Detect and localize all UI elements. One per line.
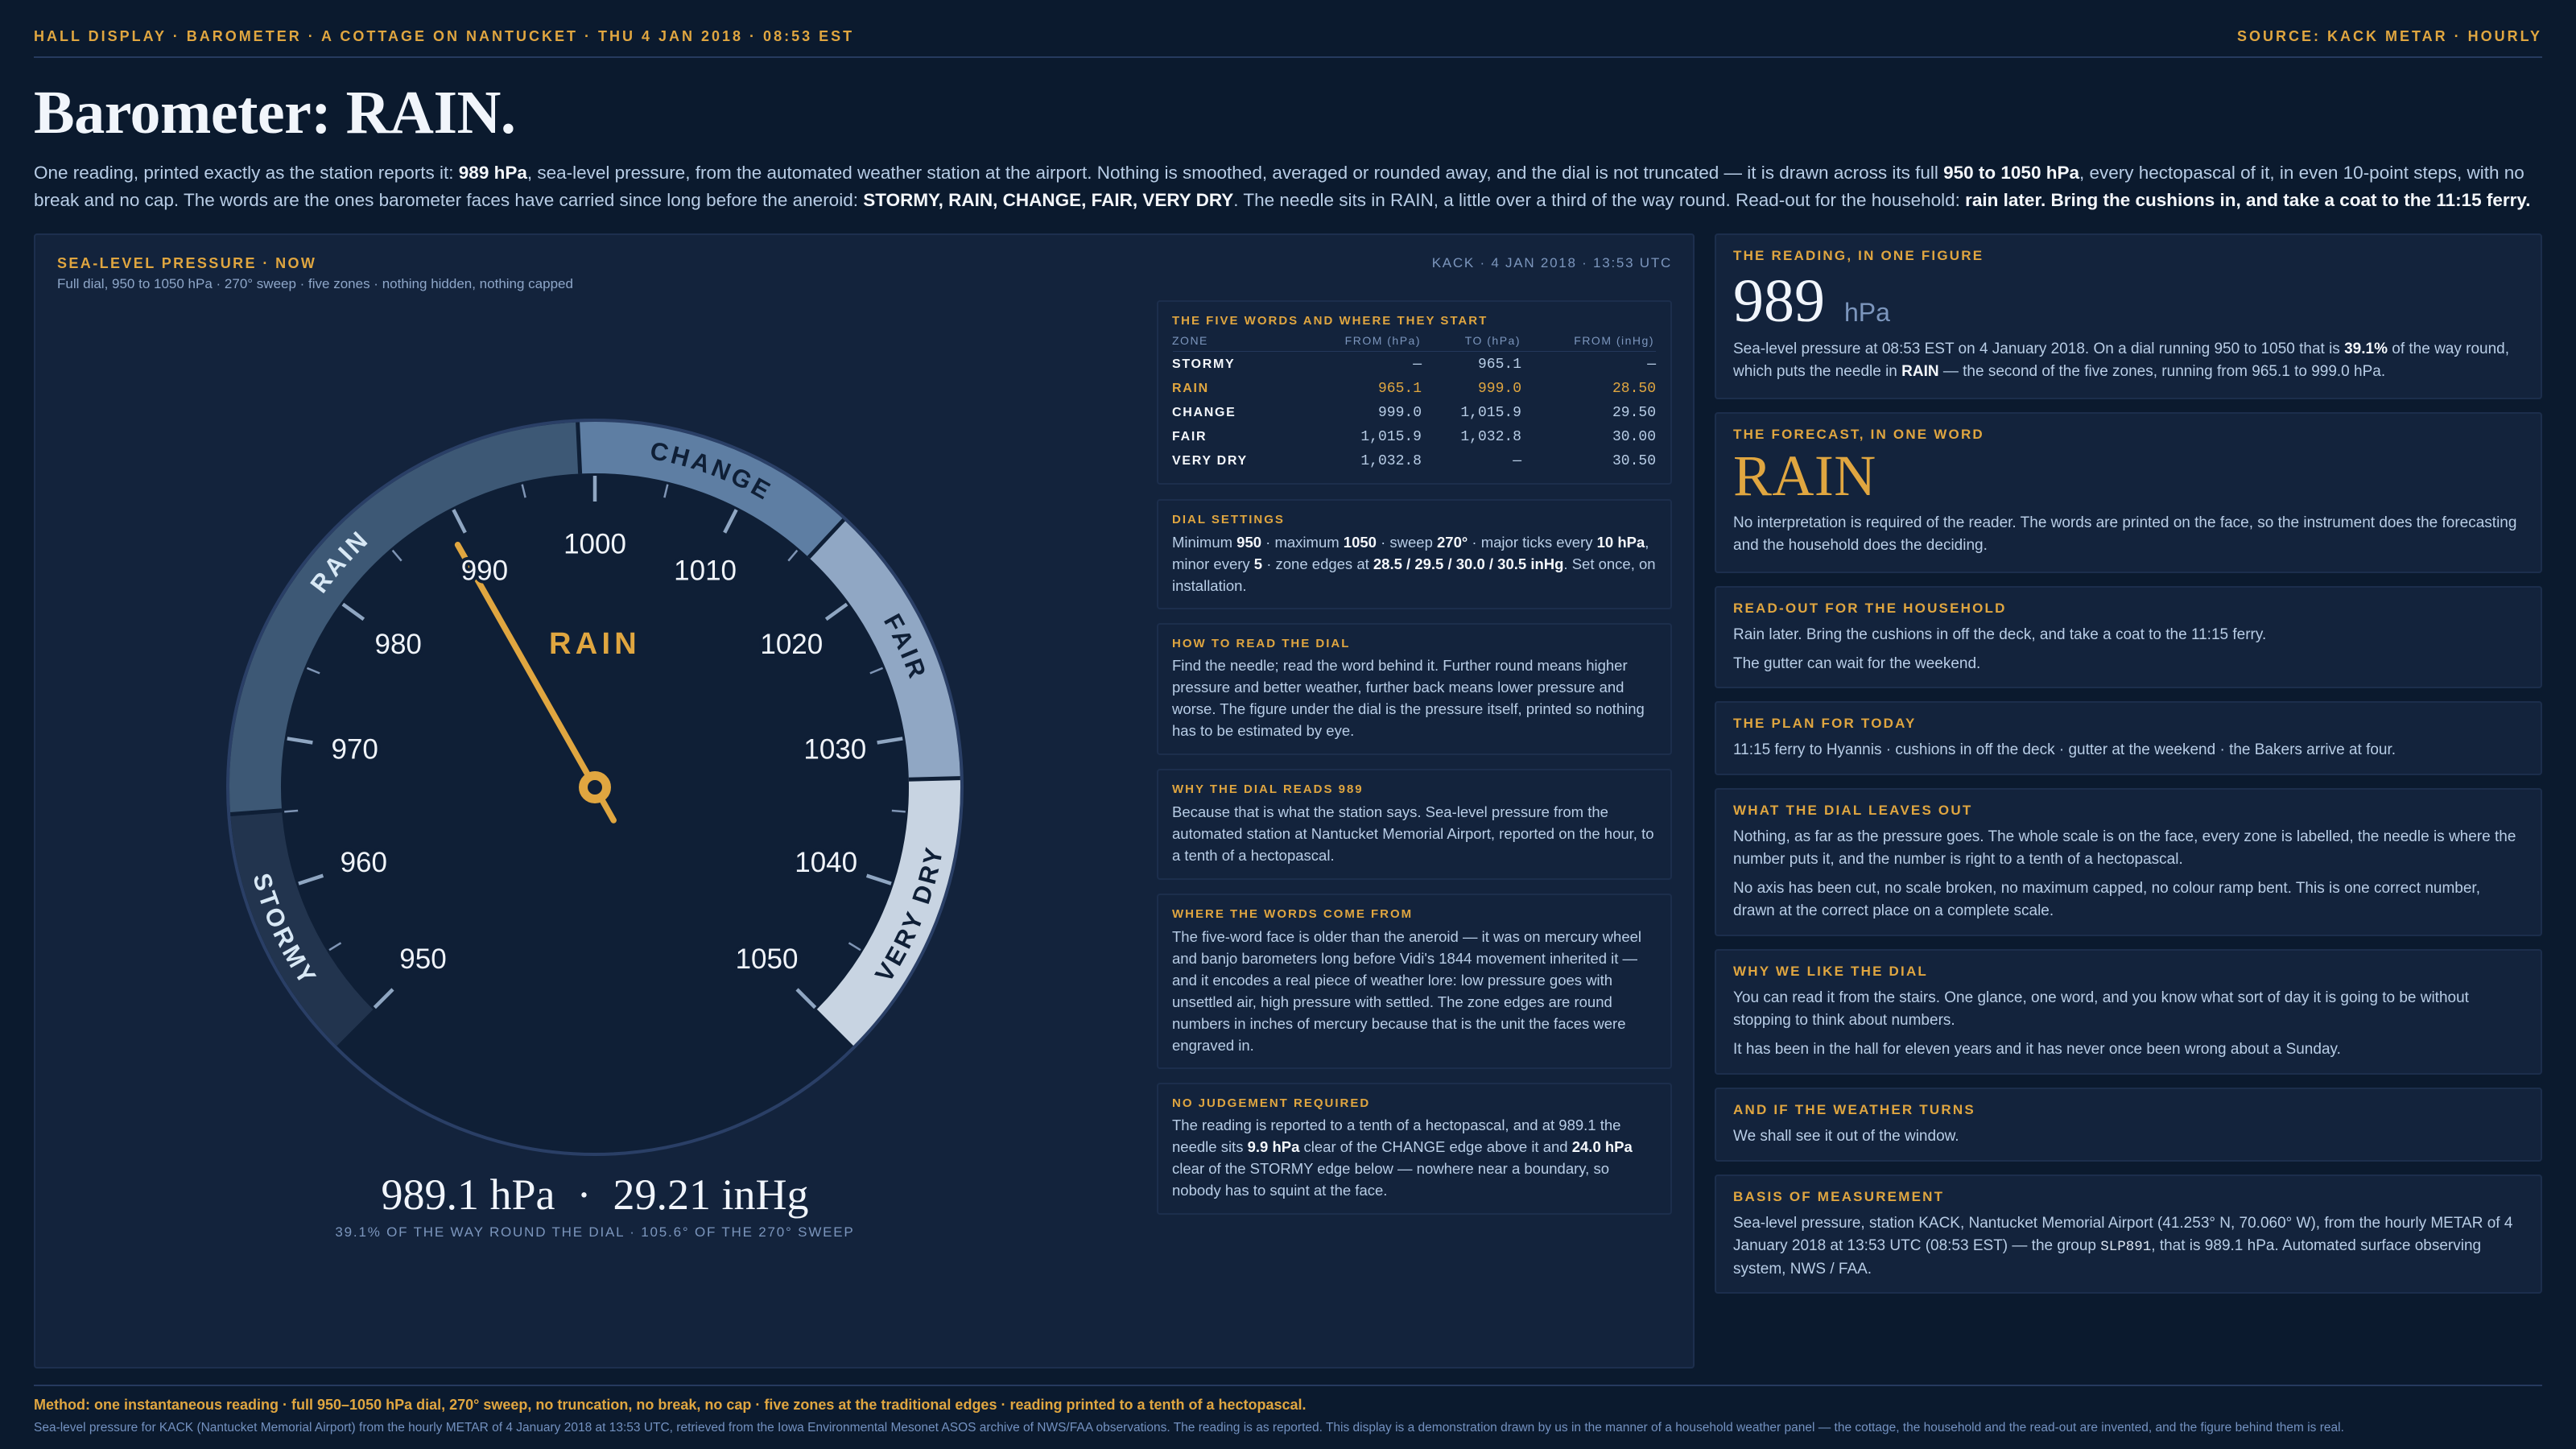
dial panel heading: SEA-LEVEL PRESSURE · NOW <box>57 255 316 271</box>
panel: leaves out: drawn at the correct place on a complete scale. <box>1733 902 2054 919</box>
body <box>1733 341 2509 380</box>
scale numbers: 1050 <box>736 943 798 975</box>
scale numbers: 1000 <box>564 528 626 560</box>
heading: DIAL SETTINGS <box>1172 513 1285 526</box>
body: needle sits 9.9 hPa clear of the CHANGE edge above it and 24.0 hPa <box>1172 1138 1633 1155</box>
body: worse. The figure under the dial is the pressure itself, printed so nothing <box>1172 700 1645 717</box>
body: has to be estimated by eye. <box>1172 722 1354 739</box>
heading: WHERE THE WORDS COME FROM <box>1172 907 1413 921</box>
row: fair: 1,032.8 <box>1460 429 1521 445</box>
row: very dry: 30.50 <box>1612 453 1656 469</box>
row: rain <box>1172 381 1656 397</box>
major ticks <box>287 476 902 1008</box>
body: Sea-level pressure, station KACK, Nantucket Memorial Airport (41.253° N, 70.060° W), from the hourly METAR of 4 <box>1733 1215 2512 1232</box>
heading: HOW TO READ THE DIAL <box>1172 637 1350 650</box>
body: number puts it, and the number is right to a tenth of a hectopascal. <box>1733 851 2183 868</box>
title: Barometer: RAIN. <box>34 79 515 147</box>
heading: BASIS OF MEASUREMENT <box>1733 1189 1944 1204</box>
body: engraved in. <box>1172 1037 1254 1054</box>
body: The reading is reported to a tenth of a hectopascal, and at 989.1 the <box>1172 1117 1620 1133</box>
zone labels: RAIN <box>310 531 367 594</box>
body <box>1172 928 1641 1054</box>
body: Find the needle; read the word behind it. Further round means higher <box>1172 657 1628 674</box>
panel: the forecast <box>1715 412 2542 573</box>
body <box>1733 1215 2512 1278</box>
heading: THE READING, IN ONE FIGURE <box>1733 248 1984 263</box>
table heading: THE FIVE WORDS AND WHERE THEY START <box>1172 314 1488 328</box>
body <box>1172 534 1656 594</box>
panel: dial <box>34 233 1695 1368</box>
row: fair <box>1172 429 1656 445</box>
big figure: 989 hPa <box>1733 267 1890 335</box>
dial panel subheading: Full dial, 950 to 1050 hPa · 270° sweep · five zones · nothing hidden, nothing capped <box>57 276 573 291</box>
body <box>1172 803 1654 864</box>
row: change <box>1172 405 1656 421</box>
scale numbers <box>331 528 866 975</box>
row: fair: 1,015.9 <box>1360 429 1422 445</box>
dial face <box>228 420 962 1154</box>
body: and banjo barometers long before Vidi's 1844 movement inherited it — <box>1172 950 1637 967</box>
source note: Sea-level pressure for KACK (Nantucket Memorial Airport) from the hourly METAR of 4 January 2018 at 13:53 UTC, retrieved from the Iowa Environmental Mesonet ASOS archive of NWS/FAA observations. The reading is as reported. This display is a demonstration drawn by us in the manner of a household weather panel — the cottage, the household and the read-out are invented, and the figure behind them is real. <box>34 1421 2344 1435</box>
panel: leaves out: No axis has been cut, no scale broken, no maximum capped, no colour ramp bent. This is one correct number, <box>1733 880 2480 897</box>
heading: THE PLAN FOR TODAY <box>1733 716 1917 731</box>
body: Rain later. Bring the cushions in off the deck, and take a coat to the 11:15 ferry. <box>1733 626 2266 643</box>
row: very dry: 1,032.8 <box>1360 453 1422 469</box>
card: where the words come from <box>1157 894 1672 1069</box>
needle <box>458 545 613 820</box>
body: Nothing, as far as the pressure goes. The whole scale is on the face, every zone is labelled, the needle is where the <box>1733 828 2516 845</box>
scale numbers: 1040 <box>795 847 857 878</box>
scale numbers: 1020 <box>760 629 823 660</box>
row: rain: 28.50 <box>1612 381 1656 397</box>
row: fair: 30.00 <box>1612 429 1656 445</box>
big read-out: 989.1 hPa · 29.21 inHg <box>382 1170 808 1219</box>
read-out caption: 39.1% OF THE WAY ROUND THE DIAL · 105.6° OF THE 270° SWEEP <box>335 1224 855 1240</box>
row: change: 999.0 <box>1378 405 1422 421</box>
table header row: FROM (inHg) <box>1574 334 1654 347</box>
body: Because that is what the station says. Sea-level pressure from the <box>1172 803 1608 820</box>
card: dial settings <box>1157 499 1672 609</box>
card: zone table <box>1157 300 1672 485</box>
body <box>1733 989 2469 1029</box>
body: and the household does the deciding. <box>1733 537 1988 554</box>
row: very dry <box>1172 453 1656 469</box>
body: The five-word face is older than the aneroid — it was on mercury wheel <box>1172 928 1641 945</box>
body: numbers in inches of mercury because that is the unit the faces were <box>1172 1015 1626 1032</box>
body <box>1172 1117 1633 1199</box>
body <box>1172 657 1645 739</box>
heading: AND IF THE WEATHER TURNS <box>1733 1102 1975 1117</box>
scale numbers: 950 <box>399 943 447 975</box>
row: stormy: 965.1 <box>1478 357 1521 373</box>
row: very dry: VERY DRY <box>1172 454 1248 468</box>
row: very dry: — <box>1513 453 1521 469</box>
heading: WHY THE DIAL READS 989 <box>1172 782 1364 796</box>
header right: source: SOURCE: KACK METAR · HOURLY <box>2237 28 2542 44</box>
panel: plan <box>1715 701 2542 775</box>
row: fair: FAIR <box>1172 430 1207 444</box>
row: rain: 965.1 <box>1378 381 1422 397</box>
scale numbers: 1030 <box>803 733 866 765</box>
zone labels <box>254 443 942 980</box>
station and time stamp: KACK · 4 JAN 2018 · 13:53 UTC <box>1432 255 1672 270</box>
body: system, NWS / FAA. <box>1733 1261 1872 1278</box>
row: rain: 999.0 <box>1478 381 1521 397</box>
body: a tenth of a hectopascal. <box>1172 847 1335 864</box>
body: stopping to think about numbers. <box>1733 1012 1955 1029</box>
header left: kicker: HALL DISPLAY · BAROMETER · A COTTAGE ON NANTUCKET · THU 4 JAN 2018 · 08:53 EST <box>34 28 854 44</box>
body: You can read it from the stairs. One glance, one word, and you know what sort of day it is going to be without <box>1733 989 2469 1006</box>
panel: the reading <box>1715 233 2542 399</box>
body: which puts the needle in RAIN — the second of the five zones, running from 965.1 to 999.0 hPa. <box>1733 363 2385 380</box>
scale numbers: 960 <box>341 847 387 878</box>
body: minor every 5 · zone edges at 28.5 / 29.5 / 30.0 / 30.5 inHg. Set once, on <box>1172 555 1656 572</box>
body: January 2018 at 13:53 UTC (08:53 EST) — the group SLP891, that is 989.1 hPa. Automated surface observing <box>1733 1237 2481 1255</box>
heading: WHY WE LIKE THE DIAL <box>1733 964 1928 979</box>
body: installation. <box>1172 577 1247 594</box>
row: stormy: — <box>1413 357 1422 373</box>
body <box>1733 514 2516 554</box>
card: no judgement <box>1157 1083 1672 1215</box>
body: 11:15 ferry to Hyannis · cushions in off the deck · gutter at the weekend · the Bakers arrive at four. <box>1733 741 2396 758</box>
row: stormy: — <box>1647 357 1656 373</box>
heading: THE FORECAST, IN ONE WORD <box>1733 427 1984 442</box>
scale numbers: 990 <box>461 555 508 586</box>
body: pressure and better weather, further back means lower pressure and <box>1172 679 1624 696</box>
scale numbers: 1010 <box>674 555 737 586</box>
body: automated station at Nantucket Memorial Airport, reported on the hour, to <box>1172 825 1654 842</box>
scale numbers: 970 <box>331 733 378 765</box>
body: unsettled air, high pressure with settled. The zone edges are round <box>1172 993 1612 1010</box>
row: stormy <box>1172 357 1657 373</box>
panel: read-out: The gutter can wait for the weekend. <box>1733 655 1980 672</box>
scale numbers: 980 <box>374 629 422 660</box>
table header row: TO (hPa) <box>1465 334 1521 347</box>
intro paragraph <box>34 163 2530 210</box>
body: clear of the STORMY edge below — nowhere near a boundary, so <box>1172 1160 1609 1177</box>
row: change: 29.50 <box>1612 405 1656 421</box>
panel: why we like: It has been in the hall for eleven years and it has never once been wrong about a Sunday. <box>1733 1041 2341 1058</box>
heading: NO JUDGEMENT REQUIRED <box>1172 1096 1370 1110</box>
row: stormy: STORMY <box>1172 357 1235 371</box>
table header row: ZONE <box>1172 334 1208 347</box>
panel: basis <box>1715 1174 2542 1294</box>
body <box>1733 828 2516 868</box>
panel: leaves out <box>1715 788 2542 936</box>
table header row <box>1172 334 1654 347</box>
row: change: CHANGE <box>1172 406 1236 419</box>
intro paragraph: break and no cap. The words are the ones barometer faces have carried since long before the aneroid: STORMY, RAIN, CHANGE, FAIR, VERY DRY. The needle sits in RAIN, a little over a third of the way round. Read-out for the household: rain later. Bring the cushions in, and take a coat to the 11:15 ferry. <box>34 190 2530 210</box>
panel: weather turns <box>1715 1088 2542 1162</box>
row: change: 1,015.9 <box>1460 405 1521 421</box>
card: how to read <box>1157 623 1672 755</box>
zone labels: CHANGE <box>651 443 771 499</box>
heading: WHAT THE DIAL LEAVES OUT <box>1733 803 1972 818</box>
zone labels: VERY DRY <box>874 847 942 979</box>
minor ticks <box>284 485 906 950</box>
body: We shall see it out of the window. <box>1733 1128 1959 1145</box>
zone labels: FAIR <box>884 613 924 679</box>
body: No interpretation is required of the reader. The words are printed on the face, so the instrument does the forecasting <box>1733 514 2516 531</box>
body: and it encodes a real piece of weather lore: low pressure goes with <box>1172 972 1612 989</box>
current zone word: RAIN <box>549 627 641 661</box>
body: Minimum 950 · maximum 1050 · sweep 270° · major ticks every 10 hPa, <box>1172 534 1649 551</box>
card: why 989 <box>1157 769 1672 880</box>
intro paragraph: One reading, printed exactly as the station reports it: 989 hPa, sea-level pressure, from the automated weather station at the airport. Nothing is smoothed, averaged or rounded away, and the dial is not truncated — it is drawn across its full 950 to 1050 hPa, every hectopascal of it, in even 10-point steps, with no <box>34 163 2524 183</box>
zone bands <box>114 307 1075 1268</box>
zone labels: STORMY <box>254 874 317 980</box>
heading: READ-OUT FOR THE HOUSEHOLD <box>1733 601 2007 616</box>
panel: why we like <box>1715 949 2542 1075</box>
row: rain: RAIN <box>1172 382 1209 395</box>
body: Sea-level pressure at 08:53 EST on 4 January 2018. On a dial running 950 to 1050 that is 39.1% of the way round, <box>1733 341 2509 357</box>
panel: read-out <box>1715 586 2542 688</box>
body: nobody has to squint at the face. <box>1172 1182 1387 1199</box>
table header row: FROM (hPa) <box>1345 334 1421 347</box>
method line: Method: one instantaneous reading · full 950–1050 hPa dial, 270° sweep, no truncation, no break, no cap · five zones at the traditional edges · reading printed to a tenth of a hectopascal. <box>34 1397 1307 1413</box>
big word: RAIN <box>1733 444 1876 508</box>
